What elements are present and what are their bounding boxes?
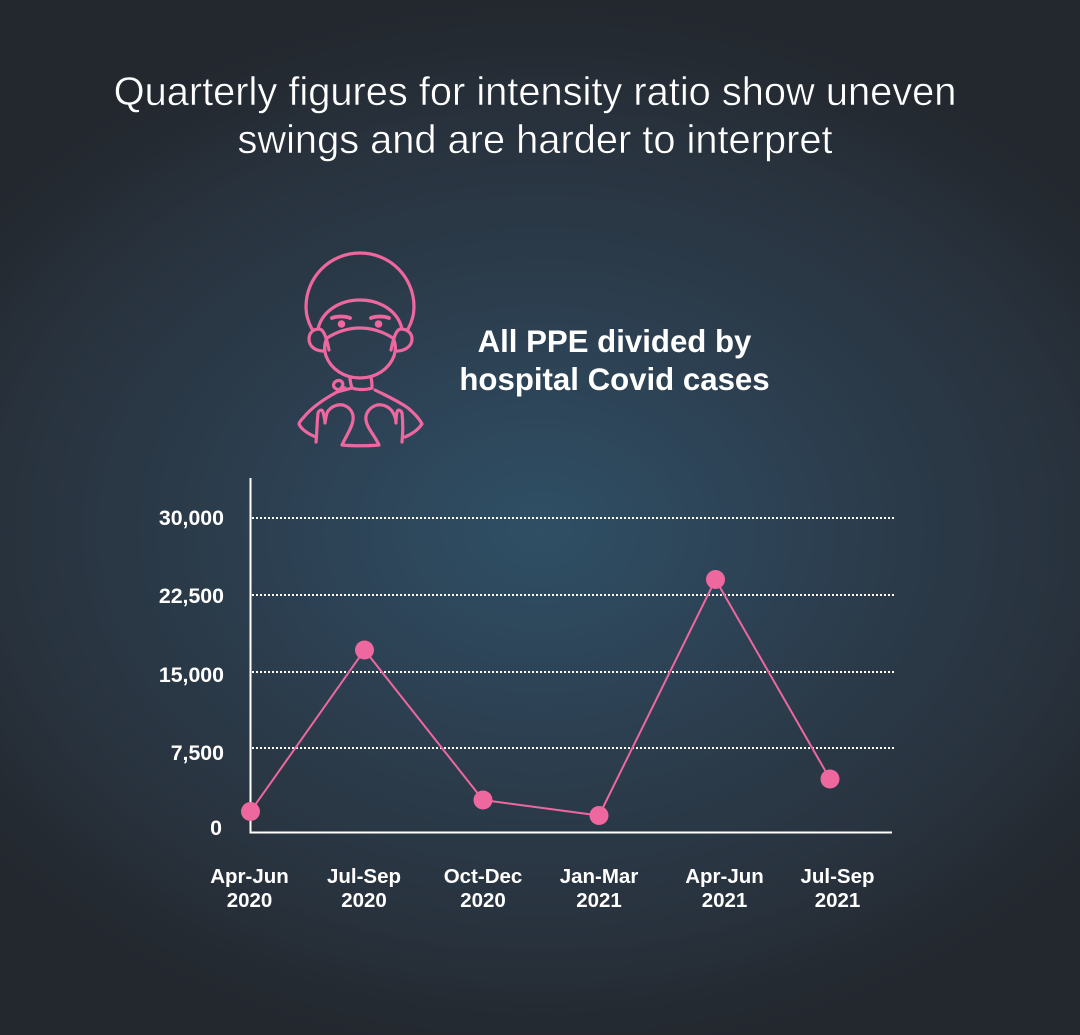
subheading: hospital Covid cases xyxy=(459,362,770,397)
axes xyxy=(250,478,892,832)
x-axis labels: Apr-Jun xyxy=(685,865,764,888)
x-axis labels: Apr-Jun xyxy=(210,865,289,888)
x-axis labels: Oct-Dec xyxy=(444,865,522,888)
grid lines xyxy=(252,518,895,748)
icon: masked health worker xyxy=(299,253,422,446)
x-axis labels: Jul-Sep xyxy=(800,865,875,888)
y-axis labels: 22,500 xyxy=(159,584,224,608)
y-axis labels: 0 xyxy=(210,816,222,840)
subheading: All PPE divided by xyxy=(478,324,751,359)
x-axis labels: 2020 xyxy=(341,889,387,912)
y-axis labels: 30,000 xyxy=(159,506,224,530)
x-axis labels: 2021 xyxy=(576,889,622,912)
y-axis labels xyxy=(159,506,224,840)
x-axis labels: Jan-Mar xyxy=(560,865,638,888)
x-axis labels: 2021 xyxy=(702,889,747,912)
x-axis labels: 2020 xyxy=(227,889,272,912)
x-axis labels: 2020 xyxy=(460,889,506,912)
title xyxy=(114,70,956,162)
line chart: intensity ratio xyxy=(241,570,840,825)
y-axis labels: 15,000 xyxy=(159,663,224,687)
x-axis labels xyxy=(210,865,875,912)
y-axis labels: 7,500 xyxy=(171,741,224,765)
subheading xyxy=(459,324,770,397)
title: swings and are harder to interpret xyxy=(237,118,833,162)
x-axis labels: 2021 xyxy=(815,889,860,912)
x-axis labels: Jul-Sep xyxy=(327,865,401,888)
title: Quarterly figures for intensity ratio show uneven xyxy=(114,70,956,114)
